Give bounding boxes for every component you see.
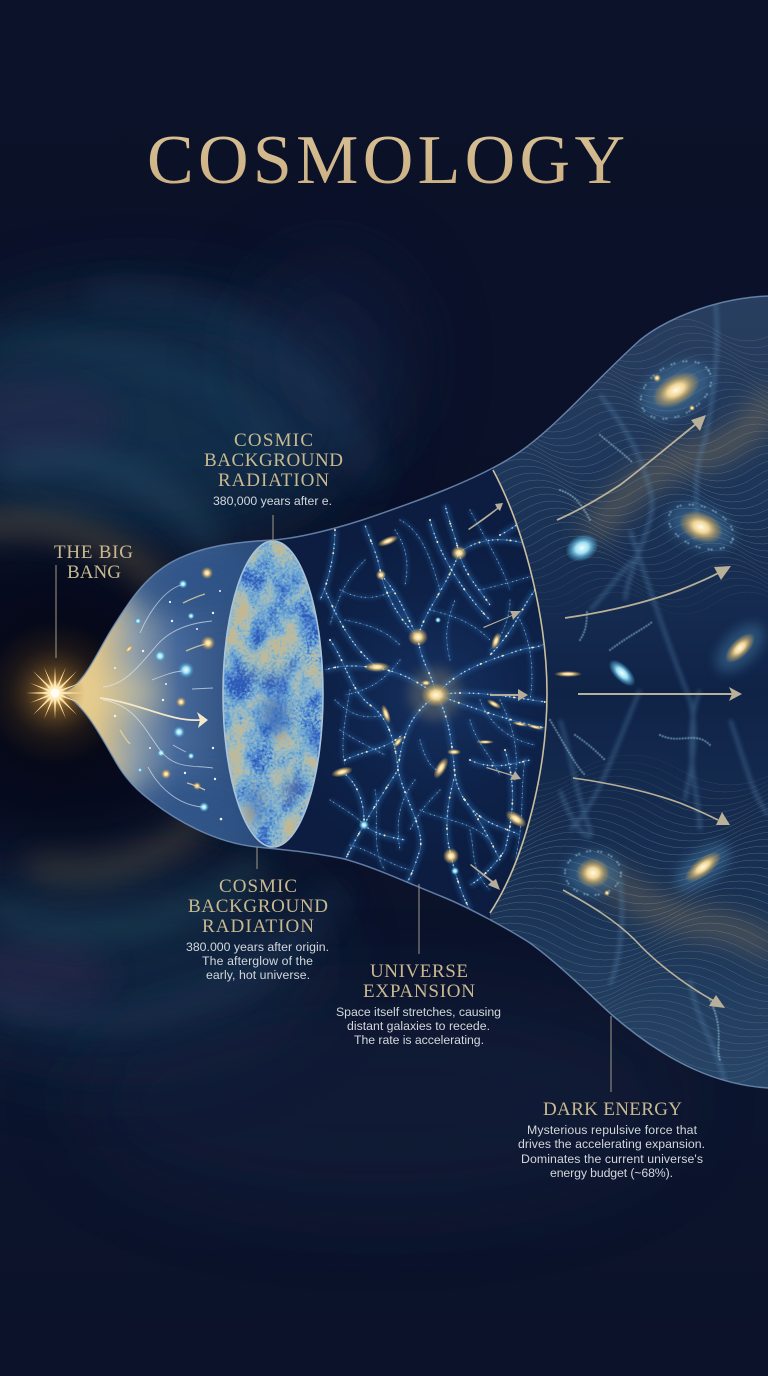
callout: dark energy	[518, 1016, 705, 1180]
callout: the big bang: THE BIG	[54, 542, 133, 563]
callout: dark energy: Dominates the current universe's	[521, 1152, 703, 1166]
big bang star	[25, 663, 85, 723]
title: COSMOLOGY	[147, 122, 625, 199]
callout: dark energy: Mysterious repulsive force that	[527, 1123, 698, 1137]
galaxy: gold streak	[554, 671, 582, 677]
galaxy: gold upper	[638, 358, 714, 422]
expansion ring	[490, 470, 547, 913]
teal nodes	[359, 617, 459, 875]
callout: cosmic background radiation top: BACKGROUND	[204, 450, 343, 471]
gold glows	[123, 567, 215, 790]
wave lines	[490, 318, 768, 1083]
callout: the big bang: BANG	[67, 562, 121, 583]
arrow: main particle flow	[100, 698, 208, 728]
callout: dark energy: DARK ENERGY	[543, 1099, 682, 1120]
callout: cosmic background radiation bottom: BACKGROUND	[188, 896, 328, 917]
galaxy: blue centre	[609, 660, 635, 686]
panel: early universe	[65, 540, 273, 848]
callout: cosmic background radiation bottom: The afterglow of the	[202, 954, 313, 968]
web galaxies	[330, 533, 544, 864]
panel: cosmic web	[273, 468, 546, 919]
callout: dark energy: energy budget (~68%).	[550, 1166, 673, 1180]
central cluster	[409, 668, 461, 720]
callout: universe expansion	[336, 884, 501, 1047]
small sparks	[114, 590, 222, 820]
arrows: web expansion	[468, 503, 528, 890]
blue glows	[134, 580, 209, 812]
callout: cosmic background radiation bottom: COSMIC	[219, 876, 297, 897]
galaxy: gold lower right	[672, 840, 734, 894]
arrows: dark energy expansion	[557, 415, 742, 1008]
callout: universe expansion: distant galaxies to recede.	[347, 1019, 490, 1033]
callout: cosmic background radiation top: 380,000 years after e.	[213, 494, 332, 508]
callout: cosmic background radiation bottom: 380.000 years after origin.	[186, 940, 329, 954]
callout: cosmic background radiation top: RADIATION	[218, 470, 329, 491]
gold streaks	[120, 594, 206, 790]
callout: universe expansion: Space itself stretches, causing	[336, 1005, 501, 1019]
callout: universe expansion: EXPANSION	[363, 981, 475, 1002]
panel: dark energy region	[490, 297, 768, 1087]
callout: universe expansion: UNIVERSE	[370, 961, 468, 982]
gold haze	[590, 395, 768, 950]
particles	[103, 567, 222, 820]
galaxy: gold right	[712, 620, 768, 676]
callout: cosmic background radiation bottom: early, hot universe.	[206, 968, 310, 982]
galaxy: gold middle	[664, 500, 737, 554]
faint filaments	[560, 300, 768, 1085]
callout: dark energy: drives the accelerating expansion.	[518, 1137, 705, 1151]
cosmic microwave background disc	[223, 541, 323, 847]
expanding universe funnel	[60, 280, 768, 1100]
callout: cosmic background radiation bottom: RADIATION	[202, 916, 314, 937]
callout: cosmic background radiation top: COSMIC	[234, 430, 313, 451]
galaxy: gold lower left	[565, 851, 621, 896]
callout: universe expansion: The rate is accelerating.	[354, 1033, 484, 1047]
funnel outline	[62, 296, 768, 1088]
callout: cosmic background radiation top	[204, 430, 343, 541]
callout: the big bang	[54, 542, 133, 658]
streaks	[103, 585, 213, 807]
galaxy: blue left	[566, 534, 598, 562]
callout: cosmic background radiation bottom	[186, 847, 329, 982]
